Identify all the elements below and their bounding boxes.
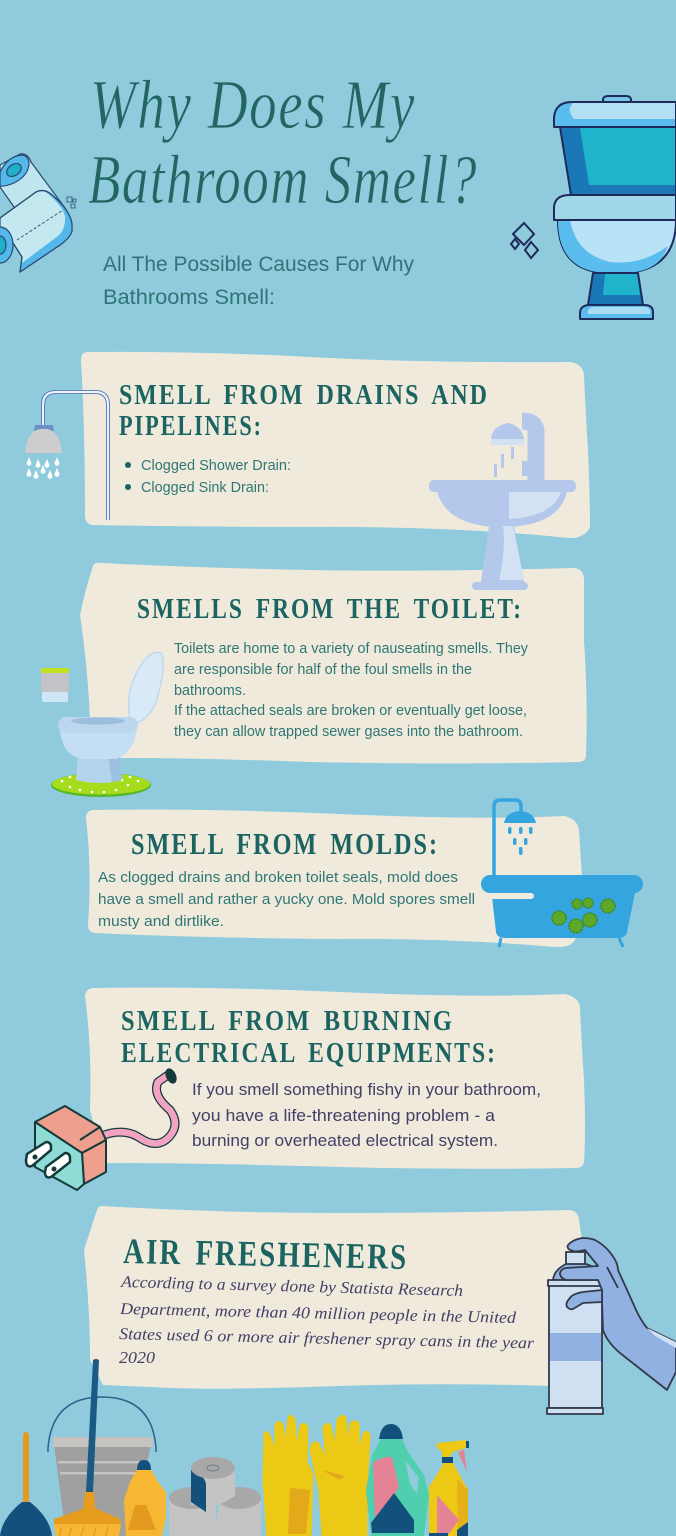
text: electrical xyxy=(192,1081,541,1150)
text: air fresheners: Department, more than 40 million people in the United xyxy=(119,1299,517,1327)
text: air fresheners xyxy=(119,1272,535,1367)
icon: bucket and mop xyxy=(48,1359,156,1536)
icon: spray bottle xyxy=(429,1440,469,1536)
text: air fresheners: 2020 xyxy=(119,1348,156,1367)
heading: drains: SMELL FROM DRAINS AND xyxy=(119,379,489,411)
text: electrical: burning or overheated electrical system. xyxy=(192,1132,498,1150)
title xyxy=(88,67,478,219)
panel: burning electrical xyxy=(85,988,585,1169)
heading: electrical: SMELL FROM BURNING xyxy=(121,1005,454,1037)
icon: shower pipe xyxy=(25,392,108,520)
icon: sparkles xyxy=(511,223,538,258)
text: molds: musty and dirtlike. xyxy=(98,913,224,930)
bullet list: Clogged Shower Drain: xyxy=(141,458,291,474)
text: toilet: are responsible for half of the foul smells in the xyxy=(174,662,472,678)
heading: drains xyxy=(119,379,489,442)
icon: large toilet xyxy=(554,96,676,319)
text: molds: have a smell and rather a yucky one. Mold spores smell xyxy=(98,891,475,908)
panel: air fresheners xyxy=(84,1206,585,1389)
title: Why Does My xyxy=(90,67,416,144)
icon: small toilet with mat xyxy=(41,652,163,797)
heading: electrical: ELECTRICAL EQUIPMENTS: xyxy=(121,1037,497,1069)
subtitle: All The Possible Causes For Why xyxy=(103,253,414,276)
icon: paper rolls xyxy=(169,1457,261,1536)
text: molds: As clogged drains and broken toilet seals, mold does xyxy=(98,869,458,886)
icon: bathtub with shower and mold xyxy=(481,800,643,947)
icon: electrical plug and cable xyxy=(26,1068,178,1190)
icon: green bottle xyxy=(366,1424,429,1536)
bullet list xyxy=(125,458,291,496)
text: electrical: If you smell something fishy in your bathroom, xyxy=(192,1081,541,1099)
text: air fresheners: States used 6 or more air freshener spray cans in the year xyxy=(119,1324,535,1352)
icon: toilet paper rolls xyxy=(0,154,76,272)
icon: orange bottle xyxy=(124,1460,166,1536)
panel: molds xyxy=(86,810,582,947)
heading: air fresheners: AIR FRESHENERS xyxy=(123,1231,409,1277)
heading: toilet: SMELLS FROM THE TOILET: xyxy=(137,593,523,625)
text: toilet xyxy=(174,641,529,740)
panel: drains and pipelines xyxy=(81,352,590,538)
text: toilet: Toilets are home to a variety of nauseating smells. They xyxy=(174,641,529,657)
text: molds xyxy=(98,869,475,930)
panel: toilet xyxy=(80,563,587,764)
subtitle: Bathrooms Smell: xyxy=(103,286,275,309)
bullet list: Clogged Sink Drain: xyxy=(141,480,269,496)
text: toilet: If the attached seals are broken or eventually get loose, xyxy=(174,703,527,719)
heading: electrical xyxy=(121,1005,497,1069)
icon: yellow gloves xyxy=(264,1416,369,1536)
title: Bathroom Smell? xyxy=(88,142,478,219)
text: air fresheners: According to a survey done by Statista Research xyxy=(120,1272,463,1300)
icon: plunger xyxy=(0,1432,52,1536)
icon: spray can and gloved hand xyxy=(547,1238,676,1414)
heading: molds: SMELL FROM MOLDS: xyxy=(131,826,439,861)
text: electrical: you have a life-threatening problem - a xyxy=(192,1107,496,1125)
subtitle xyxy=(103,253,414,309)
text: toilet: they can allow trapped sewer gases into the bathroom. xyxy=(174,724,523,740)
icon: sink xyxy=(429,421,576,590)
text: toilet: bathrooms. xyxy=(174,683,246,699)
heading: drains: PIPELINES: xyxy=(119,410,263,442)
